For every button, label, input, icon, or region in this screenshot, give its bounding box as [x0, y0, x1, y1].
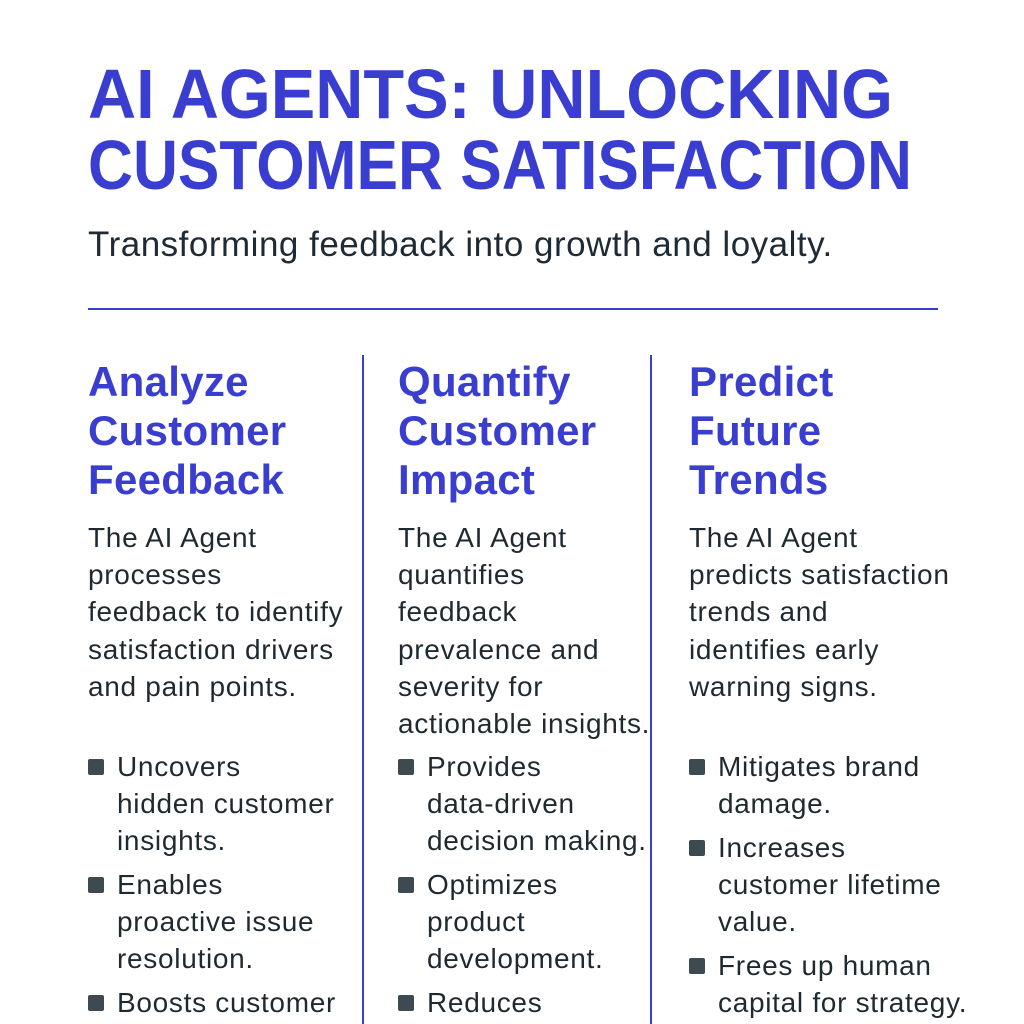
bullet list: analyze: hidden customer — [117, 788, 335, 819]
bullet list: quantify: development. — [427, 943, 604, 974]
bullet list: predict: capital for strategy. — [718, 987, 967, 1018]
text: analyze body: The AI Agent — [88, 522, 257, 553]
title: CUSTOMER SATISFACTION — [88, 126, 912, 204]
bullet list: predict: Mitigates brand — [718, 751, 920, 782]
bullet list: predict — [689, 751, 967, 1018]
heading: predict: Predict — [689, 358, 834, 405]
heading: predict: Trends — [689, 456, 829, 503]
text: analyze body: processes — [88, 559, 222, 590]
text: predict body: identifies early — [689, 634, 879, 665]
bullet list: analyze: Uncovers — [117, 751, 241, 782]
text: quantify body: quantifies — [398, 559, 525, 590]
bullet list: predict: Increases — [718, 832, 846, 863]
text: predict body — [689, 522, 950, 702]
bullet list: analyze: resolution. — [117, 943, 254, 974]
bullet list: analyze: Boosts customer — [117, 987, 336, 1018]
text: quantify body: actionable insights. — [398, 708, 650, 739]
bullet list: quantify — [398, 751, 647, 1018]
bullet list: predict: value. — [718, 906, 797, 937]
bullet list: analyze: insights. — [117, 825, 226, 856]
heading: quantify: Quantify — [398, 358, 571, 405]
heading: quantify: Customer — [398, 407, 596, 454]
text: quantify body: The AI Agent — [398, 522, 567, 553]
bullet list: quantify: data-driven — [427, 788, 575, 819]
heading: analyze — [88, 358, 286, 503]
bullet list: quantify: Reduces — [427, 987, 542, 1018]
text: quantify body: severity for — [398, 671, 543, 702]
text: quantify body: prevalence and — [398, 634, 599, 665]
text: quantify body: feedback — [398, 596, 517, 627]
title: AI AGENTS: UNLOCKING — [88, 55, 893, 133]
heading: analyze: Feedback — [88, 456, 284, 503]
bullet list: analyze — [88, 751, 336, 1018]
text: analyze body — [88, 522, 343, 702]
text: analyze body: feedback to identify — [88, 596, 343, 627]
heading: predict: Future — [689, 407, 821, 454]
bullet list: predict: customer lifetime — [718, 869, 942, 900]
bullet list: predict: Frees up human — [718, 950, 932, 981]
panel: predict — [689, 358, 967, 1018]
text: predict body: trends and — [689, 596, 828, 627]
subtitle: Transforming feedback into growth and loyalty. — [88, 225, 833, 264]
heading: analyze: Analyze — [88, 358, 249, 405]
panel: analyze — [88, 358, 343, 1018]
panel: quantify — [398, 358, 650, 1018]
bullet list: quantify: Provides — [427, 751, 542, 782]
bullet list: quantify: decision making. — [427, 825, 647, 856]
text: predict body: predicts satisfaction — [689, 559, 950, 590]
bullet list: quantify: product — [427, 906, 525, 937]
heading: quantify — [398, 358, 596, 503]
bullet list: analyze: Enables — [117, 869, 223, 900]
heading: quantify: Impact — [398, 456, 535, 503]
bullet list: predict: damage. — [718, 788, 832, 819]
heading: analyze: Customer — [88, 407, 286, 454]
text: analyze body: satisfaction drivers — [88, 634, 334, 665]
text: analyze body: and pain points. — [88, 671, 297, 702]
title — [88, 55, 912, 204]
text: predict body: warning signs. — [689, 671, 878, 702]
text: predict body: The AI Agent — [689, 522, 858, 553]
bullet list: analyze: proactive issue — [117, 906, 314, 937]
text: quantify body — [398, 522, 650, 739]
bullet list: quantify: Optimizes — [427, 869, 558, 900]
heading: predict — [689, 358, 834, 503]
